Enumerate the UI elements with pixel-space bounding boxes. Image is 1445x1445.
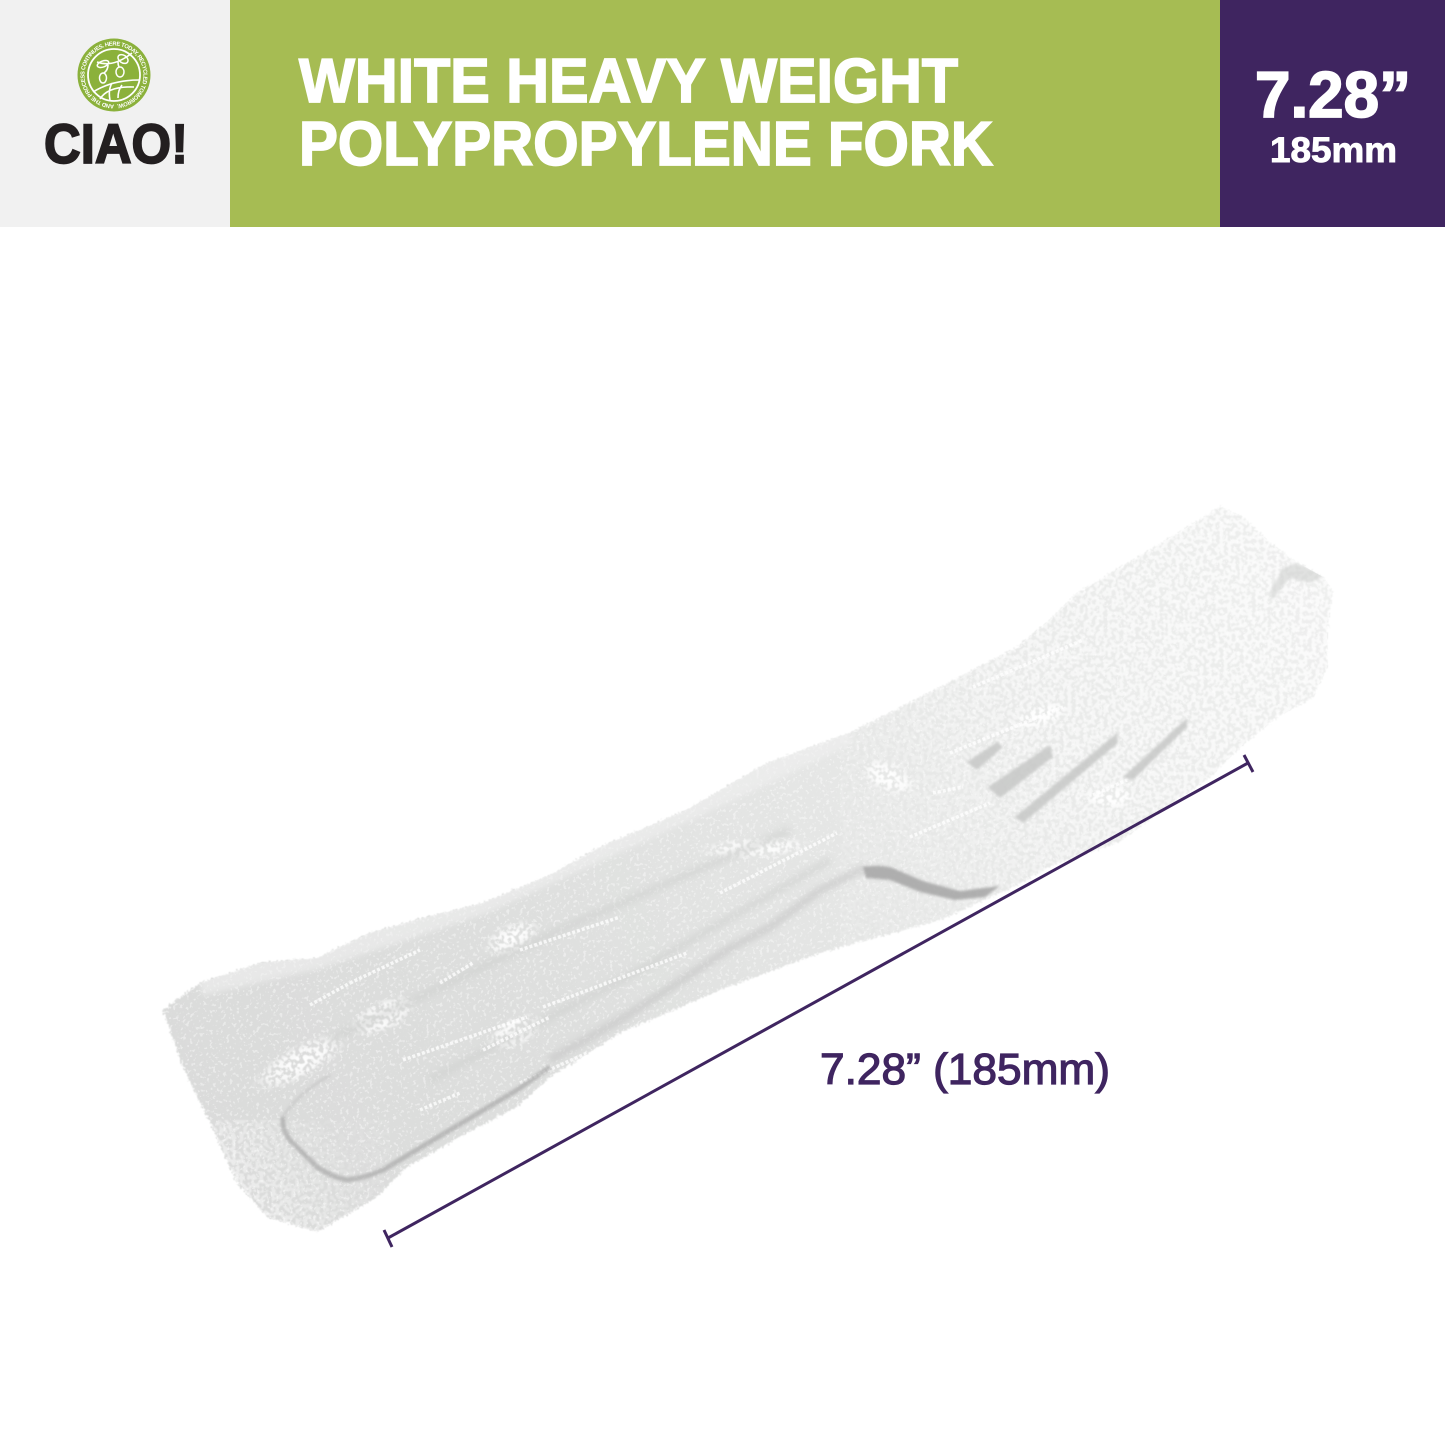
dimension line xyxy=(384,755,1253,1247)
product photo: wrapped fork xyxy=(160,500,1340,1240)
icon: green circular badge with olive branch: AND THE PROCESS CONTINUES. HERE TODAY, RECYCLED TOMORROW. xyxy=(80,42,148,108)
lighter upper edge xyxy=(202,819,682,993)
title: WHITE HEAVY WEIGHT xyxy=(299,47,958,116)
fork tine slots xyxy=(967,718,1187,823)
title: POLYPROPYLENE FORK xyxy=(299,110,993,179)
fork handle top outline (faint) xyxy=(283,1075,330,1117)
fork handle shadow xyxy=(550,867,867,1060)
size in inches: 7.28” xyxy=(1255,58,1411,131)
mottled glare on fork head xyxy=(918,508,1332,882)
fork handle outline xyxy=(283,1067,550,1180)
header: size panel xyxy=(1220,0,1445,227)
bright glare patches xyxy=(258,710,1117,1088)
mottled glare on handle end xyxy=(212,1120,346,1231)
dotted highlights along the fork xyxy=(310,640,1127,1110)
header: title panel xyxy=(230,0,1220,227)
fork neck shadow xyxy=(863,866,1000,900)
wrapper texture and fork details xyxy=(160,500,1340,1240)
logo wordmark: CIAO! xyxy=(44,112,188,175)
header: logo panel xyxy=(0,0,230,227)
wrapper seal shading xyxy=(1270,563,1326,600)
dimension label: 7.28” (185mm) xyxy=(820,1045,1110,1094)
plastic wrapper body xyxy=(163,507,1332,1232)
soft handle bands xyxy=(330,830,830,1080)
size in millimetres: 185mm xyxy=(1270,131,1397,170)
